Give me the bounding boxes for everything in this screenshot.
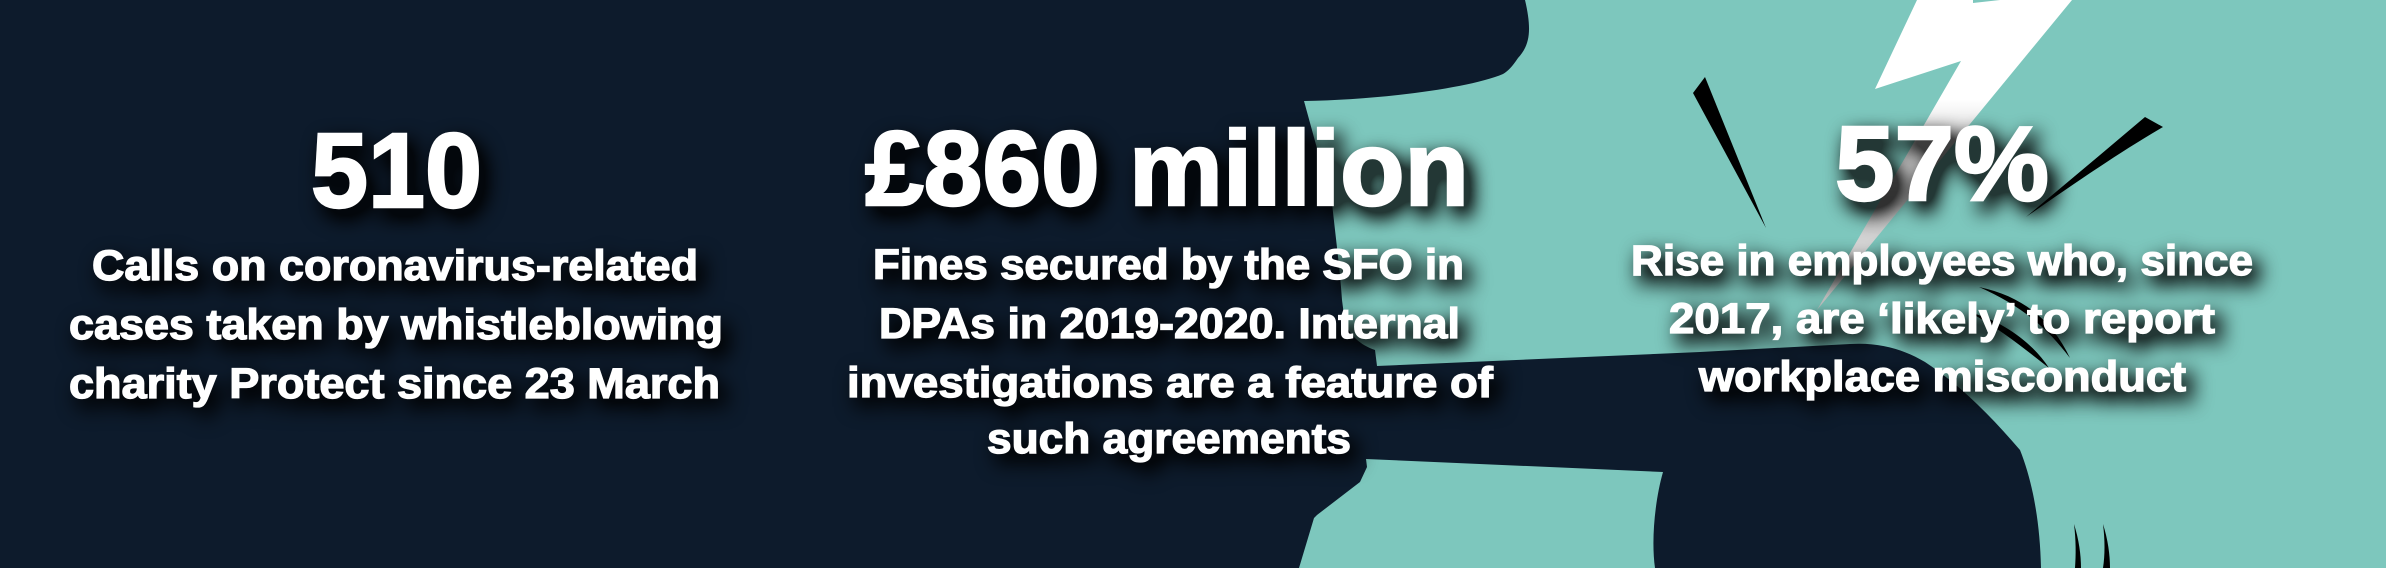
icon: curved scratch marks	[1969, 287, 2070, 368]
icon: lower scratch marks	[2074, 524, 2110, 568]
stat: 57% rise	[1631, 105, 2253, 401]
icon: right scratch mark	[2026, 117, 2163, 217]
stat: £860 million fines	[847, 110, 1494, 463]
description: SFO fines: Fines secured by the SFO in	[873, 241, 1464, 289]
description: SFO fines	[847, 241, 1494, 463]
description: coronavirus-related calls	[69, 242, 723, 408]
description: employee reporting	[1631, 237, 2253, 401]
description: employee reporting: workplace misconduct	[1698, 353, 2186, 401]
description: coronavirus-related calls: Calls on coronavirus-related	[92, 242, 698, 290]
description: SFO fines: DPAs in 2019-2020. Internal	[879, 300, 1460, 348]
number: 57%: 57%	[1835, 105, 2049, 223]
description: coronavirus-related calls: charity Protect since 23 March	[69, 360, 720, 408]
number: £860 million: £860 million	[865, 110, 1469, 228]
description: SFO fines: investigations are a feature of	[847, 359, 1494, 407]
icon: left scratch mark	[1693, 77, 1766, 228]
description: coronavirus-related calls: cases taken by whistleblowing	[69, 301, 723, 349]
icon: lightning bolt	[1817, 0, 2072, 310]
description: SFO fines: such agreements	[987, 415, 1351, 463]
stat: 510 calls	[69, 112, 723, 408]
description: employee reporting: Rise in employees who, since	[1631, 237, 2253, 285]
number: 510: 510	[311, 112, 482, 230]
description: employee reporting: 2017, are ‘likely’ to report	[1669, 295, 2215, 343]
